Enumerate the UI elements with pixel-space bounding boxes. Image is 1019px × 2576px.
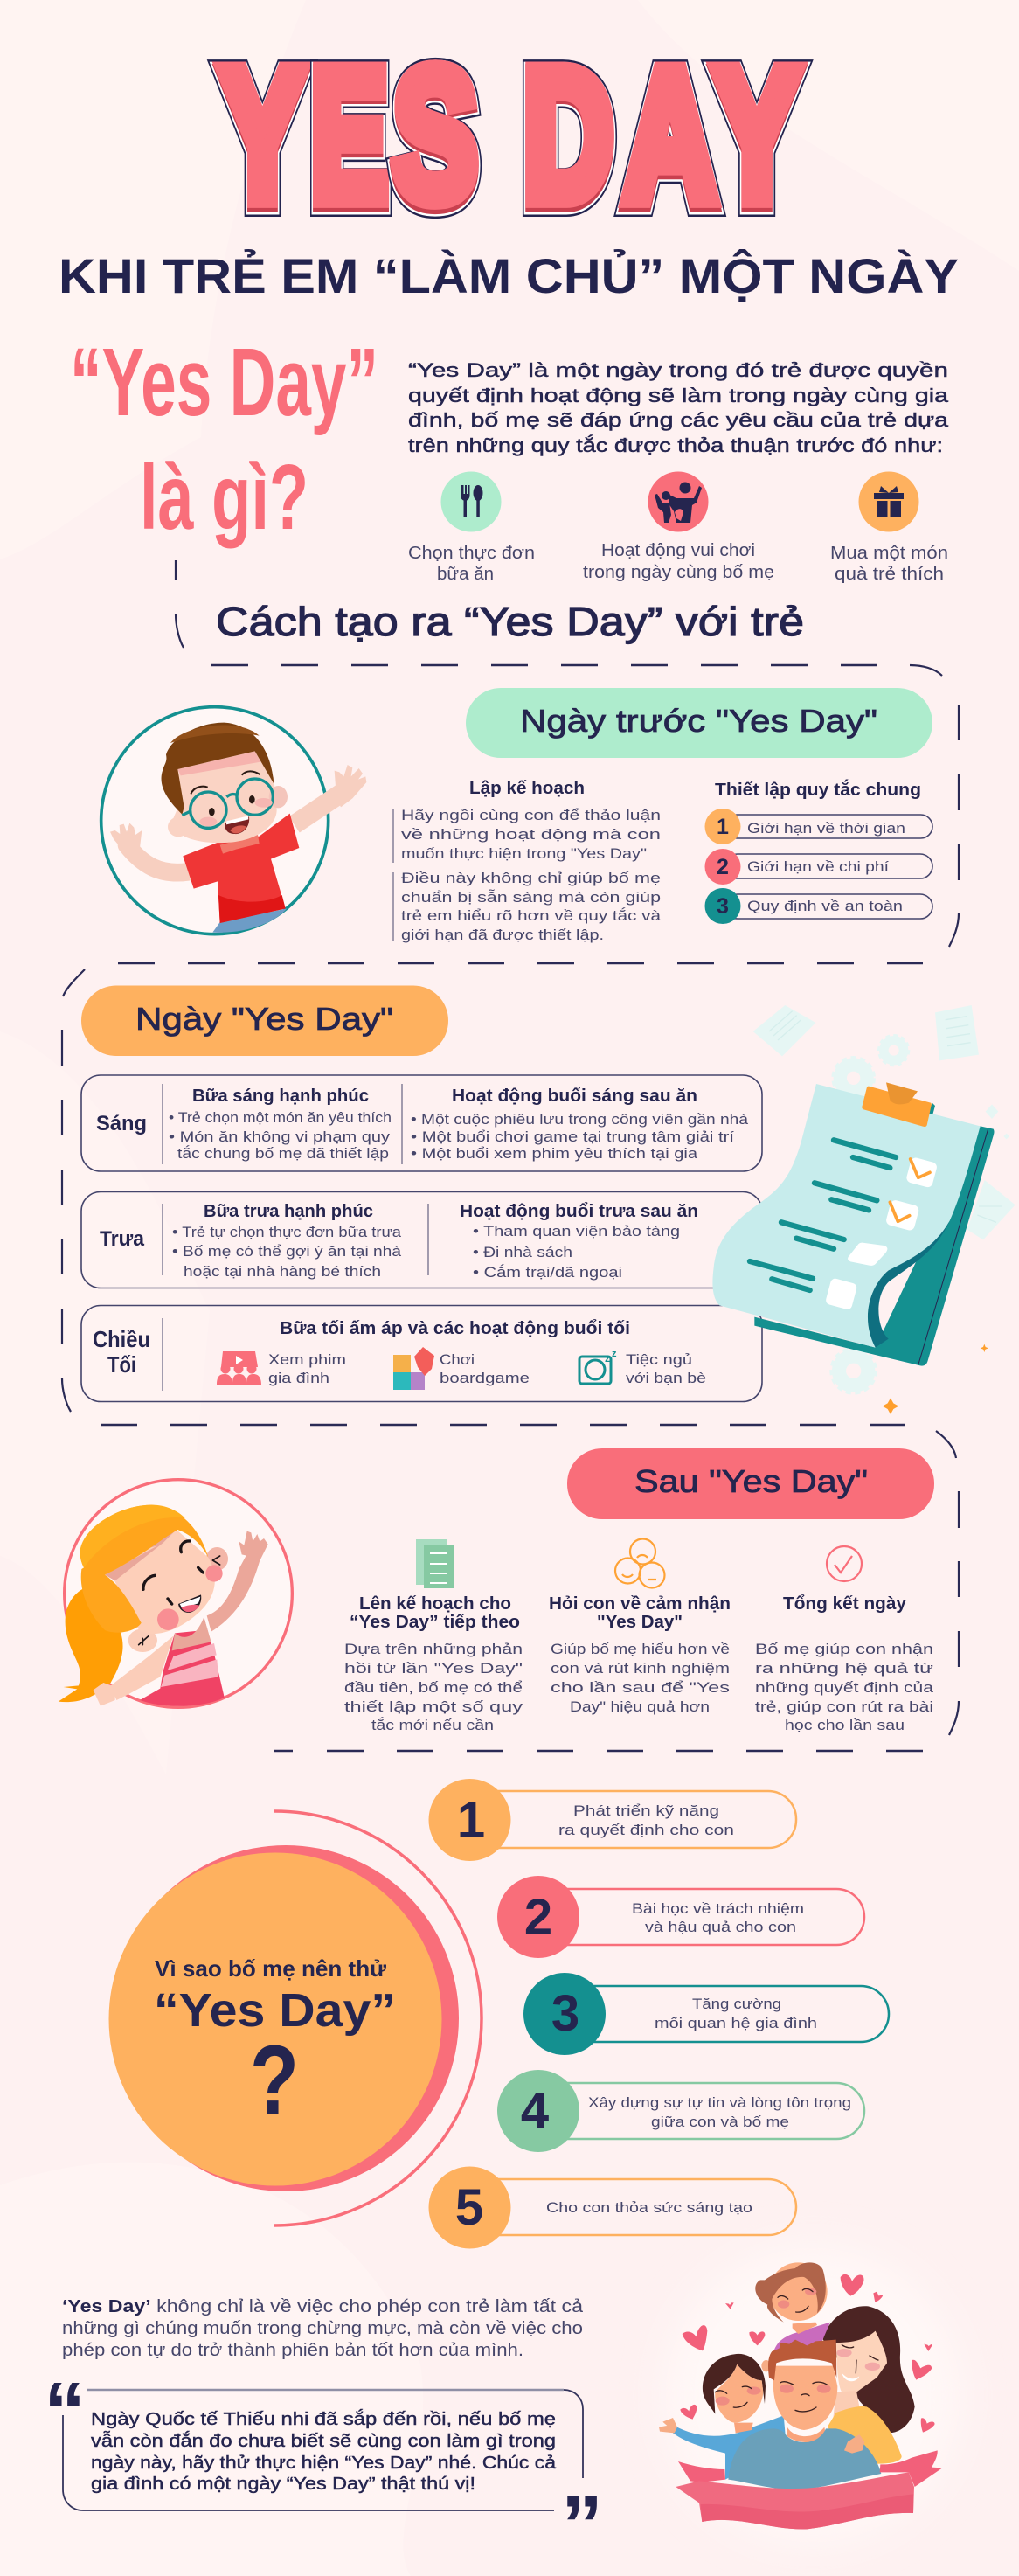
text: planning: muốn thực hiện trong "Yes Day" xyxy=(401,845,647,862)
text: planning: Lập kế hoạch xyxy=(469,779,585,798)
col: next plan: tắc mới nếu cần xyxy=(371,1717,494,1733)
illustration: clipboard xyxy=(712,1005,1016,1414)
title: YES DAY: D xyxy=(523,32,613,243)
text: planning: về những hoạt động mà con xyxy=(401,826,661,843)
col: ask child: Day" hiệu quả hơn xyxy=(570,1698,710,1715)
icon: gift xyxy=(858,472,919,531)
icon captions: bữa ăn xyxy=(437,565,494,584)
quote box: gia đình có một ngày “Yes Day” thật thú vị! xyxy=(91,2475,475,2494)
panel: morning: Bữa sáng hạnh phúc xyxy=(192,1087,369,1106)
item 5: 5 xyxy=(455,2179,483,2236)
panel: evening: boardgame xyxy=(440,1370,530,1386)
col: next plan: hồi từ lần "Yes Day" xyxy=(344,1660,523,1677)
text: planning: Hãy ngồi cùng con để thảo luận xyxy=(401,807,661,823)
icon captions: Chọn thực đơn xyxy=(408,544,535,563)
panel: evening: Chiều xyxy=(93,1326,150,1352)
big circle: why: ? xyxy=(250,2025,299,2135)
col: review: học cho lần sau xyxy=(785,1717,905,1733)
rules list xyxy=(704,779,932,924)
panel: noon: • Tham quan viện bảo tàng xyxy=(473,1223,680,1239)
col: review: Tổng kết ngày xyxy=(783,1594,907,1614)
col: review: trẻ, giúp con rút ra bài xyxy=(755,1698,933,1715)
col: ask child xyxy=(549,1538,731,1715)
icon captions: Mua một món xyxy=(830,544,948,563)
item 1: ra quyết định cho con xyxy=(558,1822,734,1838)
big circle: why: Vì sao bố mẹ nên thử xyxy=(155,1955,386,1982)
icon: movie xyxy=(217,1351,261,1385)
icon: sleep: z xyxy=(605,1352,610,1364)
col: next plan xyxy=(344,1539,523,1733)
col: next plan: Dựa trên những phản xyxy=(344,1641,523,1657)
panel: noon: • Trẻ tự chọn thực đơn bữa trưa xyxy=(172,1224,402,1240)
item 4 xyxy=(497,2070,864,2152)
item 1 xyxy=(428,1779,796,1861)
title: YES DAY: E xyxy=(311,32,387,239)
panel: noon: hoặc tại nhà hàng bé thích xyxy=(184,1263,381,1280)
title: YES DAY: Y xyxy=(715,31,799,239)
big circle: why xyxy=(108,1811,482,2225)
col: ask child: con và rút kinh nghiệm xyxy=(551,1660,730,1677)
item 3 xyxy=(523,1973,889,2055)
text: planning: trẻ em hiểu rõ hơn về quy tắc và xyxy=(401,907,662,924)
item 5 xyxy=(428,2166,796,2248)
title: YES DAY: E xyxy=(311,33,387,243)
icon: faces xyxy=(615,1538,664,1587)
title: YES DAY: D xyxy=(523,32,613,239)
item 2: và hậu quả cho con xyxy=(645,1919,796,1935)
rules list: Giới hạn về thời gian xyxy=(747,820,905,837)
item 4: Xây dựng sự tự tin và lòng tôn trọng xyxy=(588,2094,851,2111)
panel: evening: Chơi xyxy=(440,1351,475,1368)
panel: noon xyxy=(81,1192,762,1288)
illustration: family xyxy=(659,2262,942,2529)
heading: Yes Day là gì xyxy=(70,329,378,549)
quote box: “ xyxy=(44,2365,86,2459)
col: next plan: thiết lập một số quy xyxy=(344,1698,523,1715)
col: next plan: đầu tiên, bố mẹ có thể xyxy=(344,1679,523,1696)
title: YES DAY: Y xyxy=(715,32,799,243)
closing paragraph: ‘Yes Day’ không chỉ là về việc cho phép con trẻ làm tất cả xyxy=(62,2297,584,2316)
item 2 xyxy=(497,1876,864,1958)
panel: evening xyxy=(81,1306,762,1402)
text: planning xyxy=(393,779,662,943)
title: YES DAY: E xyxy=(311,33,387,243)
title: YES DAY: Y xyxy=(221,32,304,243)
panel: morning: • Một cuộc phiêu lưu trong công viên gần nhà xyxy=(411,1111,749,1128)
subtitle: KHI TRẺ EM “LÀM CHỦ” MỘT NGÀY xyxy=(59,248,959,303)
heading: how to create: Cách tạo ra “Yes Day” với trẻ xyxy=(216,599,804,644)
col: review xyxy=(755,1546,934,1733)
panel: morning: • Món ăn không vi phạm quy xyxy=(169,1128,391,1145)
title: YES DAY: Y xyxy=(715,32,799,243)
text: planning: chuẩn bị sẵn sàng mà còn giúp xyxy=(401,889,661,906)
closing paragraph: phép con tự do trở thành phiên bản tốt hơn của mình. xyxy=(62,2341,523,2360)
panel: morning: • Một buổi xem phim yêu thích tại gia xyxy=(411,1145,698,1162)
panel: noon: • Đi nhà sách xyxy=(473,1244,572,1260)
pill: day before: Ngày trước "Yes Day" xyxy=(520,703,877,739)
item 3: 3 xyxy=(551,1985,579,2042)
illustration: boy xyxy=(101,707,366,934)
item 4: giữa con và bố mẹ xyxy=(651,2114,789,2130)
title: YES DAY: S xyxy=(393,31,477,239)
intro paragraph xyxy=(408,359,949,456)
item 1: Phát triển kỹ năng xyxy=(573,1802,719,1819)
title: YES DAY: E xyxy=(311,33,387,243)
icon captions: quà trẻ thích xyxy=(835,565,944,584)
icon: puzzle xyxy=(393,1347,434,1390)
quote box xyxy=(44,2365,603,2572)
title: YES DAY: Y xyxy=(715,32,799,243)
item 2: 2 xyxy=(524,1889,552,1946)
col: next plan: Lên kế hoạch cho xyxy=(359,1594,511,1614)
rules list: 2 xyxy=(717,855,729,879)
title: YES DAY: A xyxy=(624,33,717,243)
col: ask child: "Yes Day" xyxy=(597,1613,683,1632)
icon: family activity xyxy=(648,472,708,531)
title: YES DAY: Y xyxy=(221,32,304,243)
title: YES DAY: Y xyxy=(221,32,304,239)
panel: evening: Bữa tối ấm áp và các hoạt động buổi tối xyxy=(280,1319,630,1338)
title: YES DAY: D xyxy=(523,32,613,243)
item 1: 1 xyxy=(457,1792,485,1849)
pill: after: Sau "Yes Day" xyxy=(634,1463,868,1499)
item 5: Cho con thỏa sức sáng tạo xyxy=(546,2199,752,2216)
item 4: 4 xyxy=(521,2082,549,2139)
icon captions: Hoạt động vui chơi xyxy=(601,541,755,560)
title: YES DAY: S xyxy=(393,32,477,243)
panel: morning: tắc chung bố mẹ đã thiết lập xyxy=(177,1145,389,1162)
heading: Yes Day là gì: “Yes Day” xyxy=(70,329,378,436)
col: review: Bố mẹ giúp con nhận xyxy=(755,1641,933,1657)
panel: evening: gia đình xyxy=(268,1370,329,1386)
panel: morning: Sáng xyxy=(96,1112,147,1135)
pill: yes day xyxy=(81,986,448,1056)
col: ask child: Hỏi con về cảm nhận xyxy=(549,1594,731,1614)
panel: evening: Tối xyxy=(107,1351,136,1378)
col: next plan: “Yes Day” tiếp theo xyxy=(350,1613,520,1632)
panel: morning xyxy=(81,1075,762,1171)
title: YES DAY: Y xyxy=(221,32,304,243)
closing paragraph: những gì chúng muốn trong chừng mực, mà còn về việc cho xyxy=(62,2319,583,2338)
title: YES DAY: A xyxy=(624,31,717,238)
text: planning: giới hạn đã được thiết lập. xyxy=(401,927,604,943)
title: YES DAY: A xyxy=(624,33,717,243)
col: review: ra những hệ quả từ xyxy=(755,1660,933,1677)
quote box: vẫn còn đắn đo chưa biết sẽ cùng con làm gì trong xyxy=(91,2431,556,2451)
icon captions: trong ngày cùng bố mẹ xyxy=(583,563,774,582)
item 3: Tăng cường xyxy=(692,1996,781,2012)
intro paragraph: đình, bố mẹ sẽ đáp ứng các yêu cầu của trẻ dựa xyxy=(408,409,949,431)
closing paragraph xyxy=(62,2297,584,2360)
item 3: mối quan hệ gia đình xyxy=(655,2015,817,2031)
icon: sleep: z xyxy=(612,1349,617,1359)
panel: evening: Tiệc ngủ xyxy=(626,1351,692,1368)
intro paragraph: trên những quy tắc được thỏa thuận trước đó như: xyxy=(408,434,943,456)
pill: yes day: Ngày "Yes Day" xyxy=(135,1001,393,1037)
panel: noon: Trưa xyxy=(100,1227,145,1251)
heading: Yes Day là gì: là gì? xyxy=(140,446,308,549)
icon: sleep xyxy=(579,1349,617,1384)
rules list: Thiết lập quy tắc chung xyxy=(715,779,921,800)
panel: evening: Xem phim xyxy=(268,1351,346,1368)
panel: morning: • Trẻ chọn một món ăn yêu thích xyxy=(169,1109,392,1126)
panel: morning: Hoạt động buổi sáng sau ăn xyxy=(452,1087,697,1106)
panel: noon: • Cắm trại/dã ngoại xyxy=(473,1264,622,1281)
icon: check circle xyxy=(827,1546,862,1581)
panel: morning: • Một buổi chơi game tại trung tâm giải trí xyxy=(411,1128,734,1145)
icon: meal xyxy=(440,472,502,531)
item 2: Bài học về trách nhiệm xyxy=(632,1900,804,1917)
col: ask child: cho lần sau để "Yes xyxy=(551,1679,730,1696)
pill: day before xyxy=(466,688,932,758)
rules list: 3 xyxy=(717,894,729,919)
quote box: Ngày Quốc tế Thiếu nhi đã sắp đến rồi, nếu bố mẹ xyxy=(91,2409,556,2429)
rules list: Giới hạn về chi phí xyxy=(747,858,889,875)
big circle: why: “Yes Day” xyxy=(154,1984,396,2037)
quote box: ” xyxy=(561,2478,603,2572)
icon: checklist xyxy=(416,1539,454,1588)
title: YES DAY: S xyxy=(393,32,477,243)
col: review: những quyết định của xyxy=(755,1679,934,1696)
title: YES DAY xyxy=(221,31,799,243)
icon captions xyxy=(408,541,948,584)
quote box: ngày này, hãy thử thực hiện “Yes Day” nhé. Chúc cả xyxy=(91,2454,557,2473)
intro paragraph: “Yes Day” là một ngày trong đó trẻ được quyền xyxy=(408,359,948,381)
col: ask child: Giúp bố mẹ hiểu hơn về xyxy=(551,1641,730,1657)
panel: noon: Hoạt động buổi trưa sau ăn xyxy=(460,1202,698,1221)
panel: evening: với bạn bè xyxy=(626,1370,706,1386)
title: YES DAY: A xyxy=(624,33,717,243)
rules list: 1 xyxy=(717,815,729,839)
illustration: girl xyxy=(59,1480,292,1707)
rules list: Quy định về an toàn xyxy=(747,898,903,914)
panel: noon: Bữa trưa hạnh phúc xyxy=(204,1202,373,1221)
intro paragraph: quyết định hoạt động sẽ làm trong ngày cùng gia xyxy=(408,385,949,406)
title: YES DAY: S xyxy=(393,32,477,243)
title: YES DAY: D xyxy=(523,32,613,243)
text: planning: Điều này không chỉ giúp bố mẹ xyxy=(401,870,661,886)
pill: after xyxy=(567,1448,934,1519)
panel: noon: • Bố mẹ có thể gợi ý ăn tại nhà xyxy=(172,1243,402,1260)
